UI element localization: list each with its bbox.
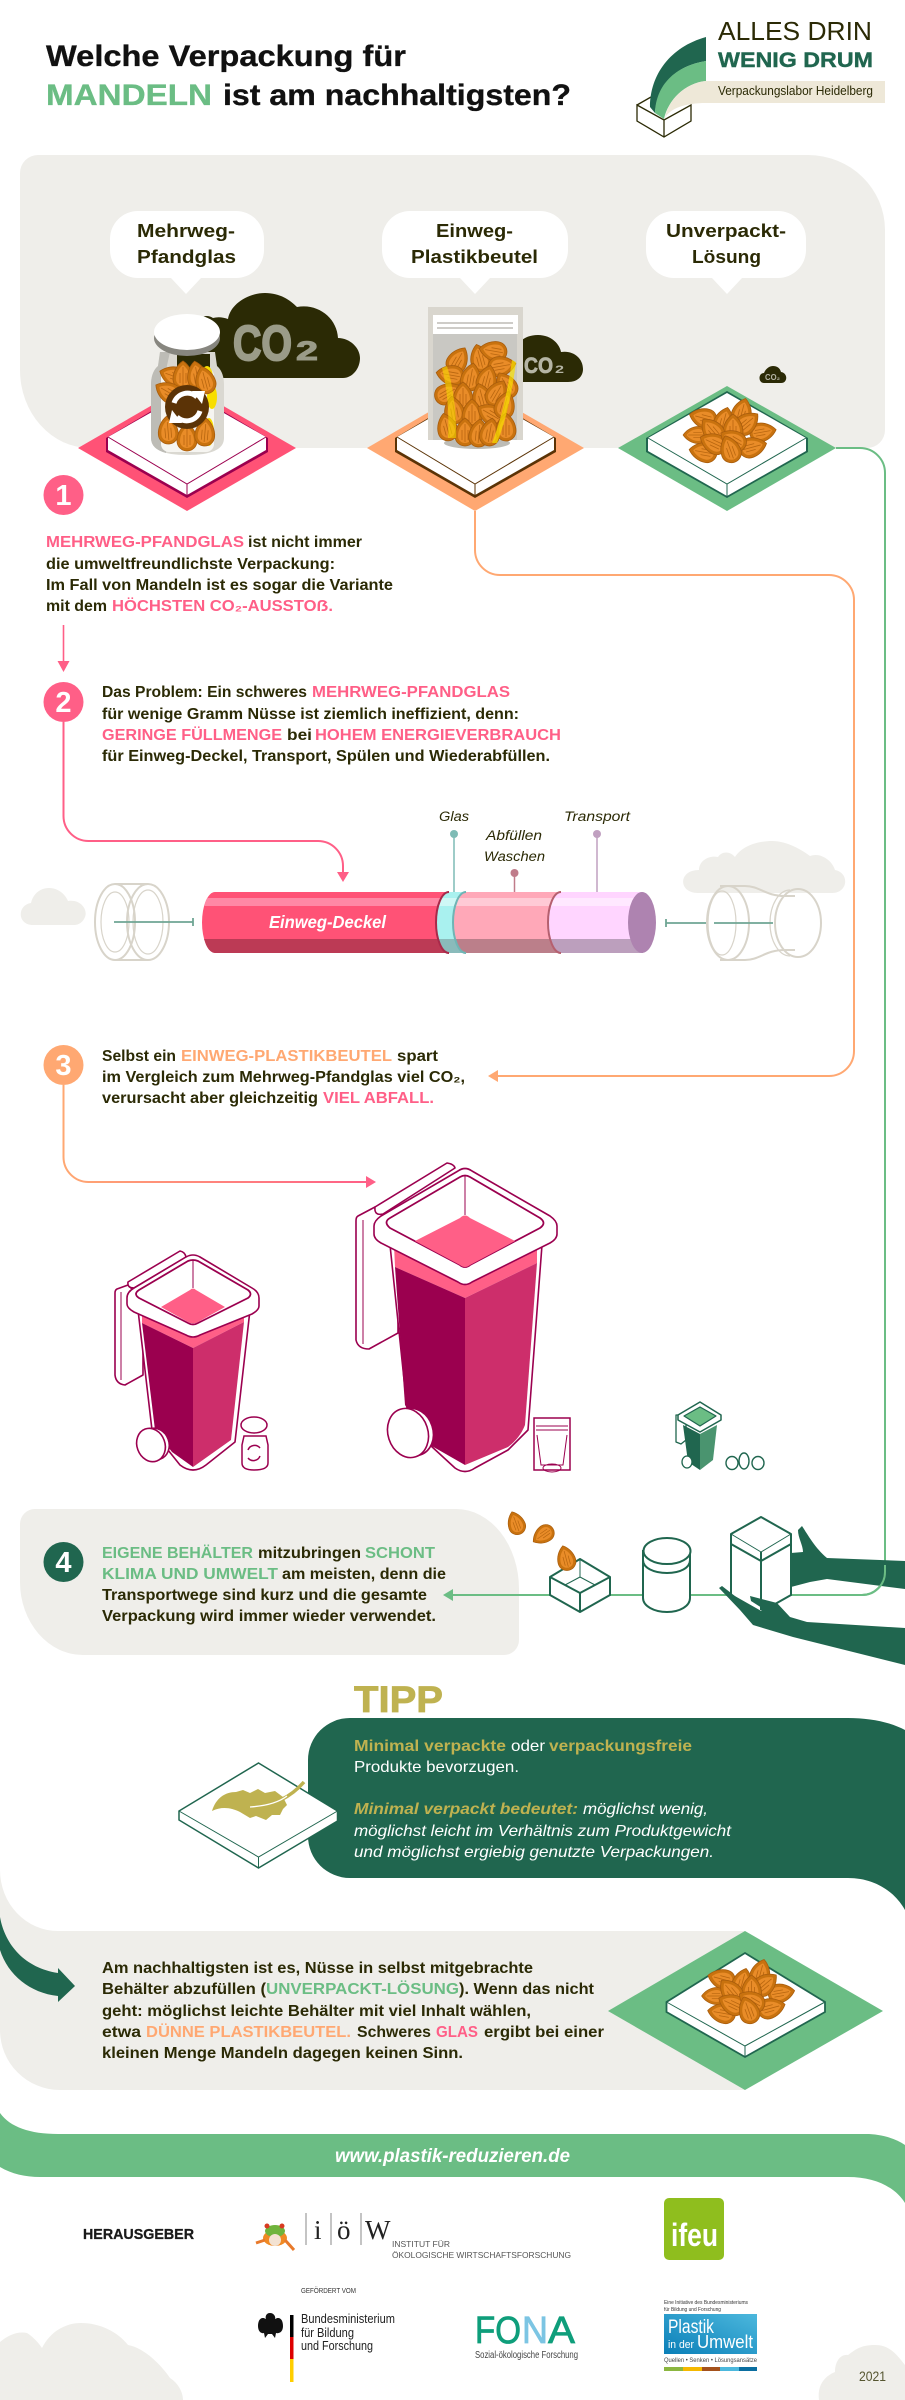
text block: step 4: EIGENE BEHÄLTER bbox=[102, 1544, 253, 1562]
label: Glas: Glas bbox=[439, 809, 469, 824]
icon: medium CO2 cloud: CO bbox=[524, 353, 553, 378]
text block: conclusion: geht: möglichst leichte Behälter mit viel Inhalt wählen, bbox=[102, 2003, 531, 2020]
panel: conclusion bbox=[0, 1870, 745, 2090]
text block: step 2: HOHEM ENERGIEVERBRAUCH bbox=[315, 727, 561, 744]
text block: tip bbox=[354, 1738, 732, 1861]
text block: conclusion: kleinen Menge Mandeln dagegen keinen Sinn. bbox=[102, 2045, 463, 2062]
logo: Alles drin, wenig drum: WENIG DRUM bbox=[718, 49, 873, 72]
text block: conclusion: Schweres bbox=[357, 2024, 431, 2041]
icon: left glass ring bbox=[95, 884, 169, 960]
panel: packaging comparison background bbox=[20, 155, 885, 448]
arrow: step 1 to step 2 bbox=[58, 625, 70, 672]
step 4 number: 4 bbox=[55, 1547, 72, 1579]
step 4 number bbox=[44, 1542, 84, 1582]
logo: FONA: N bbox=[522, 2310, 548, 2352]
icon: tiny CO2 cloud bbox=[760, 366, 786, 383]
text block: tip: Minimal verpackt bedeutet: bbox=[354, 1801, 578, 1818]
text block: step 1: die umweltfreundlichste Verpackung: bbox=[46, 556, 335, 573]
label: Glas bbox=[439, 809, 469, 892]
icon: three almonds outline bbox=[726, 1453, 764, 1470]
icon: mini glass jar bbox=[241, 1417, 268, 1470]
title: Welche Verpackung für bbox=[46, 40, 406, 73]
logo: Plastik in der Umwelt: Quellen • Senken • Lösungsansätze bbox=[664, 2358, 758, 2364]
arrow: green path from unpacked solution to step 4 bbox=[836, 448, 885, 1595]
text block: step 4: mitzubringen bbox=[258, 1545, 361, 1562]
decoration: bottom left cloud bbox=[0, 2323, 183, 2400]
speech bubble: Einweg-Plastikbeutel bbox=[382, 211, 568, 294]
logo: Plastik in der Umwelt: Eine Initiative des Bundesministeriums bbox=[664, 2300, 748, 2306]
decoration: bottom right cloud bbox=[819, 2345, 905, 2400]
icon: green diamond platform bbox=[618, 386, 836, 511]
speech bubble: Unverpackt-Lösung: Unverpackt- bbox=[666, 221, 786, 241]
logo: Plastik in der Umwelt: Plastik bbox=[668, 2317, 714, 2338]
text block: step 2: für wenige Gramm Nüsse ist ziemlich ineffizient, denn: bbox=[102, 706, 519, 723]
text block: step 3: verursacht aber gleichzeitig bbox=[102, 1090, 318, 1107]
icon: medium CO2 cloud bbox=[510, 335, 583, 382]
logo: Alles drin, wenig drum: ALLES DRIN bbox=[718, 16, 872, 46]
icon: cube container bbox=[731, 1517, 791, 1612]
logo: Bundesministerium: Bundesministerium bbox=[301, 2312, 395, 2326]
arrow: orange path from plastic bag to step 3 bbox=[475, 511, 854, 1082]
text block: tip: oder bbox=[511, 1738, 546, 1755]
label: Gefördert vom: GEFÖRDERT VOM bbox=[301, 2286, 356, 2295]
icon: falling almonds bbox=[504, 1509, 578, 1572]
text block: conclusion: DÜNNE PLASTIKBEUTEL. bbox=[146, 2022, 351, 2041]
icon: large CO2 cloud: CO bbox=[233, 317, 292, 371]
label: Herausgeber: HERAUSGEBER bbox=[83, 2226, 194, 2243]
text block: tip: Minimal verpackte bbox=[354, 1738, 506, 1755]
text block: step 3: VIEL ABFALL. bbox=[323, 1090, 434, 1107]
icon: almond pile bbox=[683, 396, 778, 466]
text block: step 1 bbox=[46, 534, 393, 615]
logo: FONA: FO bbox=[475, 2310, 521, 2352]
logo: Plastik in der Umwelt: in der bbox=[668, 2339, 694, 2351]
speech bubble: Mehrweg-Pfandglas: Pfandglas bbox=[137, 247, 236, 267]
icon: large CO2 cloud bbox=[200, 293, 360, 378]
text block: step 1: MEHRWEG-PFANDGLAS bbox=[46, 534, 244, 551]
icon: leaf tile bbox=[179, 1763, 338, 1868]
icon: upper hand bbox=[791, 1526, 905, 1589]
icon: medium CO2 cloud: 2 bbox=[555, 364, 564, 376]
icon: large waste bin bbox=[356, 1163, 557, 1472]
logo: IOEW bbox=[306, 2213, 571, 2260]
text block: step 1: mit dem bbox=[46, 598, 107, 615]
text block: step 2: Das Problem: Ein schweres bbox=[102, 684, 307, 701]
logo: FONA: Sozial-ökologische Forschung bbox=[475, 2350, 578, 2361]
icon: large CO2 cloud: 2 bbox=[296, 336, 318, 366]
text block: tip: Produkte bevorzugen. bbox=[354, 1759, 519, 1776]
text block: step 4: Verpackung wird immer wieder verwendet. bbox=[102, 1608, 436, 1625]
speech bubble: Mehrweg-Pfandglas: Mehrweg- bbox=[137, 221, 235, 241]
chart: cylinder bbox=[200, 892, 656, 953]
title: ist am nachhaltigsten? bbox=[223, 79, 571, 112]
logo: ifeu bbox=[664, 2198, 724, 2260]
text block: step 2: GERINGE FÜLLMENGE bbox=[102, 725, 282, 744]
logo: FONA: A bbox=[548, 2310, 576, 2352]
speech bubble: Einweg-Plastikbeutel: Einweg- bbox=[436, 221, 513, 241]
text block: step 4: KLIMA UND UMWELT bbox=[102, 1566, 278, 1583]
heading: TIPP: TIPP bbox=[354, 1679, 443, 1720]
label: Transport bbox=[564, 809, 631, 892]
text block: conclusion: GLAS bbox=[436, 2024, 478, 2041]
text block: step 3: spart bbox=[397, 1048, 439, 1065]
text block: step 4 bbox=[102, 1544, 446, 1625]
step 3 number bbox=[44, 1045, 84, 1085]
decoration: right cloud bbox=[683, 841, 845, 893]
text block: conclusion: Am nachhaltigsten ist es, Nüsse in selbst mitgebrachte bbox=[102, 1960, 533, 1977]
icon: orange diamond platform bbox=[367, 385, 584, 511]
text block: conclusion: etwa bbox=[102, 2024, 141, 2041]
text block: step 3 bbox=[102, 1048, 465, 1107]
label: Abfüllen Waschen: Waschen bbox=[484, 849, 545, 864]
text block: step 2 bbox=[102, 684, 561, 765]
text block: tip: verpackungsfreie bbox=[549, 1738, 692, 1755]
text block: conclusion: Behälter abzufüllen ( bbox=[102, 1981, 267, 1998]
logo: Alles drin, wenig drum: Verpackungslabor Heidelberg bbox=[718, 84, 873, 98]
step 3 number: 3 bbox=[55, 1050, 72, 1082]
icon: mini plastic bag bbox=[534, 1418, 570, 1472]
icon: tiny CO2 cloud: CO₂ bbox=[765, 372, 780, 382]
icon: right glass bottle bbox=[707, 886, 821, 960]
title bbox=[46, 40, 571, 112]
icon: lower hand bbox=[719, 1586, 905, 1665]
icon: small waste bin bbox=[115, 1251, 259, 1470]
arrow: step 3 to large bin bbox=[64, 1085, 376, 1188]
step 1 number bbox=[44, 475, 84, 515]
logo: IOEW: ö bbox=[337, 2215, 350, 2245]
text block: step 4: SCHONT bbox=[365, 1545, 435, 1562]
logo: Bundesministerium: und Forschung bbox=[301, 2339, 373, 2353]
text block: step 3: im Vergleich zum Mehrweg-Pfandglas viel CO₂, bbox=[102, 1069, 465, 1086]
icon: reusable glass jar with almonds bbox=[151, 314, 224, 455]
step 2 number bbox=[44, 682, 84, 722]
text block: step 3: Selbst ein bbox=[102, 1048, 176, 1065]
logo: Alles drin, wenig drum bbox=[637, 16, 885, 137]
logo: Plastik in der Umwelt bbox=[664, 2300, 758, 2371]
panel: tip bbox=[308, 1718, 905, 1910]
band: website: www.plastik-reduzieren.de bbox=[335, 2146, 570, 2167]
text block: tip: möglichst leicht im Verhältnis zum Produktgewicht bbox=[354, 1823, 732, 1840]
label: Abfüllen Waschen: Abfüllen bbox=[485, 828, 542, 843]
icon: right arrow line bbox=[666, 919, 773, 927]
text block: conclusion: ). Wenn das nicht bbox=[459, 1981, 595, 1998]
text block: step 4: Transportwege sind kurz und die gesamte bbox=[102, 1587, 427, 1604]
decoration: left cloud bbox=[21, 888, 86, 925]
text block: step 1: ist nicht immer bbox=[248, 534, 362, 551]
logo: IOEW: INSTITUT FÜR bbox=[392, 2239, 450, 2249]
arrow: green line into step 4 bbox=[443, 1565, 885, 1601]
icon: small green bin bbox=[676, 1402, 721, 1470]
text block: step 2: für Einweg-Deckel, Transport, Spülen und Wiederabfüllen. bbox=[102, 748, 550, 765]
text block: tip: möglichst wenig, bbox=[583, 1801, 708, 1818]
icon: open box bbox=[550, 1559, 610, 1612]
label: Abfüllen Waschen bbox=[484, 828, 545, 892]
icon: plastic bag with almonds bbox=[428, 307, 523, 449]
logo: IOEW: ÖKOLOGISCHE WIRTSCHAFTSFORSCHUNG bbox=[392, 2250, 571, 2260]
step 2 number: 2 bbox=[55, 687, 72, 719]
speech bubble: Unverpackt-Lösung bbox=[646, 211, 806, 294]
logo: ifeu: ifeu bbox=[671, 2217, 718, 2253]
speech bubble: Unverpackt-Lösung: Lösung bbox=[692, 247, 761, 267]
text block: conclusion bbox=[102, 1960, 604, 2062]
speech bubble: Einweg-Plastikbeutel: Plastikbeutel bbox=[411, 247, 538, 267]
panel: step 4 bbox=[20, 1509, 519, 1655]
label: year: 2021 bbox=[859, 2368, 886, 2384]
label: Transport: Transport bbox=[564, 809, 631, 824]
text block: step 1: Im Fall von Mandeln ist es sogar die Variante bbox=[46, 577, 393, 594]
logo: Plastik in der Umwelt: für Bildung und Forschung bbox=[664, 2307, 721, 2313]
title: MANDELN bbox=[46, 79, 212, 112]
arrow: step 2 to cylinder bbox=[64, 722, 349, 882]
label: Einweg-Deckel: Einweg-Deckel bbox=[269, 912, 387, 932]
speech bubble: Mehrweg-Pfandglas bbox=[110, 211, 264, 294]
icon: left arrow line bbox=[114, 918, 193, 926]
text block: conclusion: ergibt bei einer bbox=[484, 2024, 604, 2041]
text block: tip: und möglichst ergiebig genutzte Verpackungen. bbox=[354, 1844, 714, 1861]
logo: FONA bbox=[475, 2310, 578, 2361]
text block: step 1: HÖCHSTEN CO₂-AUSSTOẞ. bbox=[112, 596, 333, 615]
text block: step 2: MEHRWEG-PFANDGLAS bbox=[312, 684, 510, 701]
logo: frog bbox=[256, 2224, 294, 2250]
text block: step 4: am meisten, denn die bbox=[282, 1566, 446, 1583]
logo: IOEW: W bbox=[365, 2215, 391, 2245]
logo: IOEW: i bbox=[314, 2215, 322, 2245]
text block: step 2: bei bbox=[287, 727, 312, 744]
text block: step 3: EINWEG-PLASTIKBEUTEL bbox=[181, 1048, 392, 1065]
icon: jar with lid bbox=[643, 1538, 690, 1612]
step 1 number: 1 bbox=[55, 480, 72, 512]
logo: Plastik in der Umwelt: Umwelt bbox=[697, 2332, 753, 2352]
icon: pink diamond platform bbox=[78, 385, 296, 511]
logo: Bundesministerium bbox=[258, 2312, 395, 2382]
icon: conclusion diamond with almonds bbox=[608, 1931, 883, 2090]
text block: conclusion: UNVERPACKT-LÖSUNG bbox=[266, 1979, 459, 1998]
logo: Bundesministerium: für Bildung bbox=[301, 2326, 354, 2340]
arrow: dark green into conclusion bbox=[0, 1917, 75, 2002]
band: website bbox=[0, 2113, 905, 2203]
